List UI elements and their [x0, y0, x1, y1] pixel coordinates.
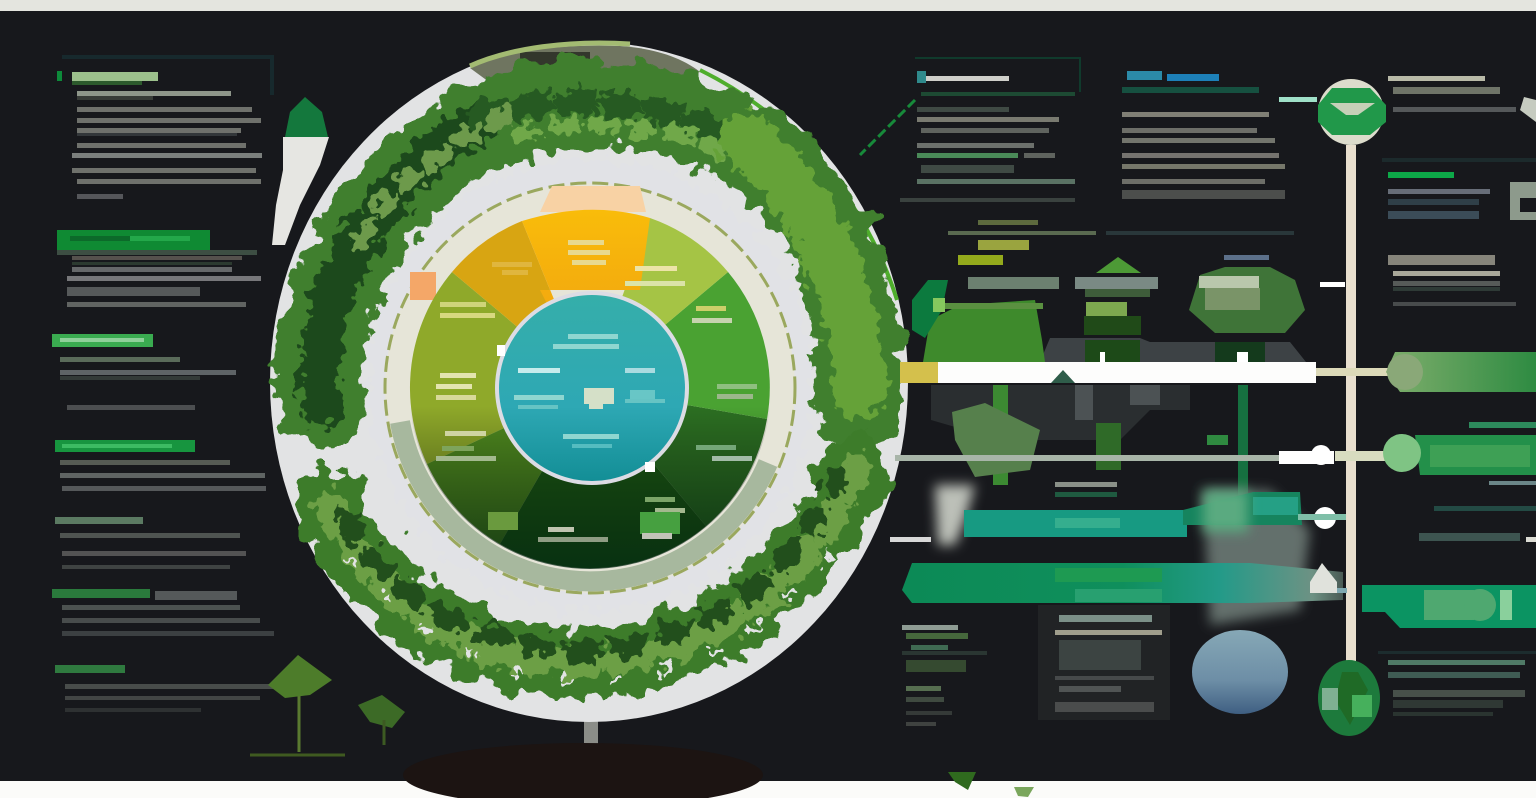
icon: center leaf	[584, 388, 614, 409]
orange marker	[410, 272, 436, 300]
beam stubs	[1100, 352, 1105, 362]
text block: column C middle	[1382, 158, 1536, 219]
connector to right bar	[1316, 368, 1391, 376]
bar 3 teal	[964, 492, 1302, 537]
text block: column C lower	[1388, 255, 1516, 306]
text block: column C top	[1388, 76, 1516, 112]
segment: orange	[522, 210, 650, 388]
rim dark block	[520, 52, 590, 80]
inner white field	[368, 159, 812, 611]
segment: gold	[452, 221, 590, 388]
foliage ring	[320, 103, 860, 682]
outer white disc	[270, 42, 908, 722]
top paper strip	[0, 0, 1536, 11]
text block: lower middle column	[1038, 605, 1170, 720]
arrow: diagonal green connector	[860, 100, 915, 155]
icon: column C grey glyph	[1510, 182, 1536, 220]
bottom paper strip	[0, 781, 1536, 798]
smoke columns	[935, 485, 975, 545]
plant 2	[1096, 423, 1121, 470]
text block: section 2	[57, 230, 261, 307]
outer rim top shading	[470, 46, 700, 90]
panel: right green bars	[1362, 352, 1536, 628]
text block: section 4	[55, 440, 266, 491]
text block: section 6	[52, 589, 274, 636]
icon: top green node	[1318, 79, 1386, 145]
text block: section 7	[55, 665, 279, 712]
stub white	[1320, 282, 1345, 287]
panel: lower text columns	[902, 481, 1536, 726]
text block: section 3	[52, 334, 236, 410]
label blue	[1224, 255, 1269, 260]
icon: small trees lower left	[250, 655, 405, 755]
plant glow	[1203, 490, 1248, 532]
panel: upper right text	[860, 58, 1536, 306]
leader at top node	[1279, 97, 1317, 102]
text block: column B	[1122, 71, 1285, 199]
segment: green lower left	[427, 388, 590, 544]
wheel segments	[409, 207, 771, 569]
segment labels	[436, 240, 757, 542]
plant 1	[952, 385, 1040, 485]
segment: green right	[590, 272, 770, 419]
icon: top right small white mark	[1520, 97, 1536, 122]
text block: section 5	[55, 517, 246, 569]
icon: sprouts on bottom strip	[948, 772, 1034, 797]
label in the forest	[1055, 482, 1117, 487]
white knot 4	[1310, 563, 1337, 593]
icon: white pot with green top	[272, 97, 329, 245]
main white beam	[938, 362, 1316, 383]
text block: lower left column	[902, 625, 987, 726]
wheel outer ring	[385, 183, 795, 593]
label lime	[978, 240, 1029, 250]
text block: section 1	[57, 57, 272, 199]
peach segment	[540, 186, 646, 212]
vertical spine	[1346, 145, 1356, 665]
icon: blue sphere	[1192, 630, 1288, 714]
segment: green lower right	[590, 388, 767, 526]
text block: right upper lines	[1419, 481, 1536, 542]
bottom shading	[409, 207, 771, 569]
text block: column A	[900, 58, 1080, 202]
beam triangle marker	[1051, 370, 1075, 383]
panel: flow connectors	[890, 97, 1391, 665]
segment: lime	[590, 218, 728, 388]
panel: central plant wheel	[270, 42, 908, 798]
text block: right lower column	[1378, 651, 1536, 716]
white knot 3	[1298, 507, 1346, 529]
thin beam 2	[895, 455, 1280, 461]
tree 1	[912, 277, 1059, 362]
hills	[1040, 338, 1306, 362]
panel: left text column	[52, 57, 279, 712]
panel: forest illustration	[912, 220, 1310, 625]
stub left 3	[890, 537, 931, 542]
leader 4	[1337, 588, 1347, 593]
stand base	[403, 743, 763, 798]
center teal disc	[495, 291, 689, 485]
stand stem	[584, 716, 598, 748]
bar 3	[1362, 585, 1536, 628]
white knot 2	[1279, 445, 1334, 465]
label lime 2	[958, 255, 1003, 265]
bar 1	[1386, 352, 1536, 392]
segment: green left	[410, 272, 590, 464]
ring lower shadow	[400, 422, 768, 581]
tree 2	[1075, 257, 1158, 362]
rule	[948, 231, 1096, 235]
segment: dark bottom	[500, 388, 706, 568]
bar 2	[1383, 422, 1536, 475]
icon: bottom green node	[1318, 660, 1380, 736]
bar 4 emerald	[902, 563, 1343, 603]
grey columns below beam	[931, 385, 1190, 440]
outer rim green highlight	[700, 70, 897, 300]
heading	[978, 220, 1038, 225]
connector 2	[1335, 451, 1385, 461]
tree 3	[1189, 267, 1305, 362]
plant 3	[1207, 385, 1248, 495]
main beam start	[900, 362, 938, 383]
